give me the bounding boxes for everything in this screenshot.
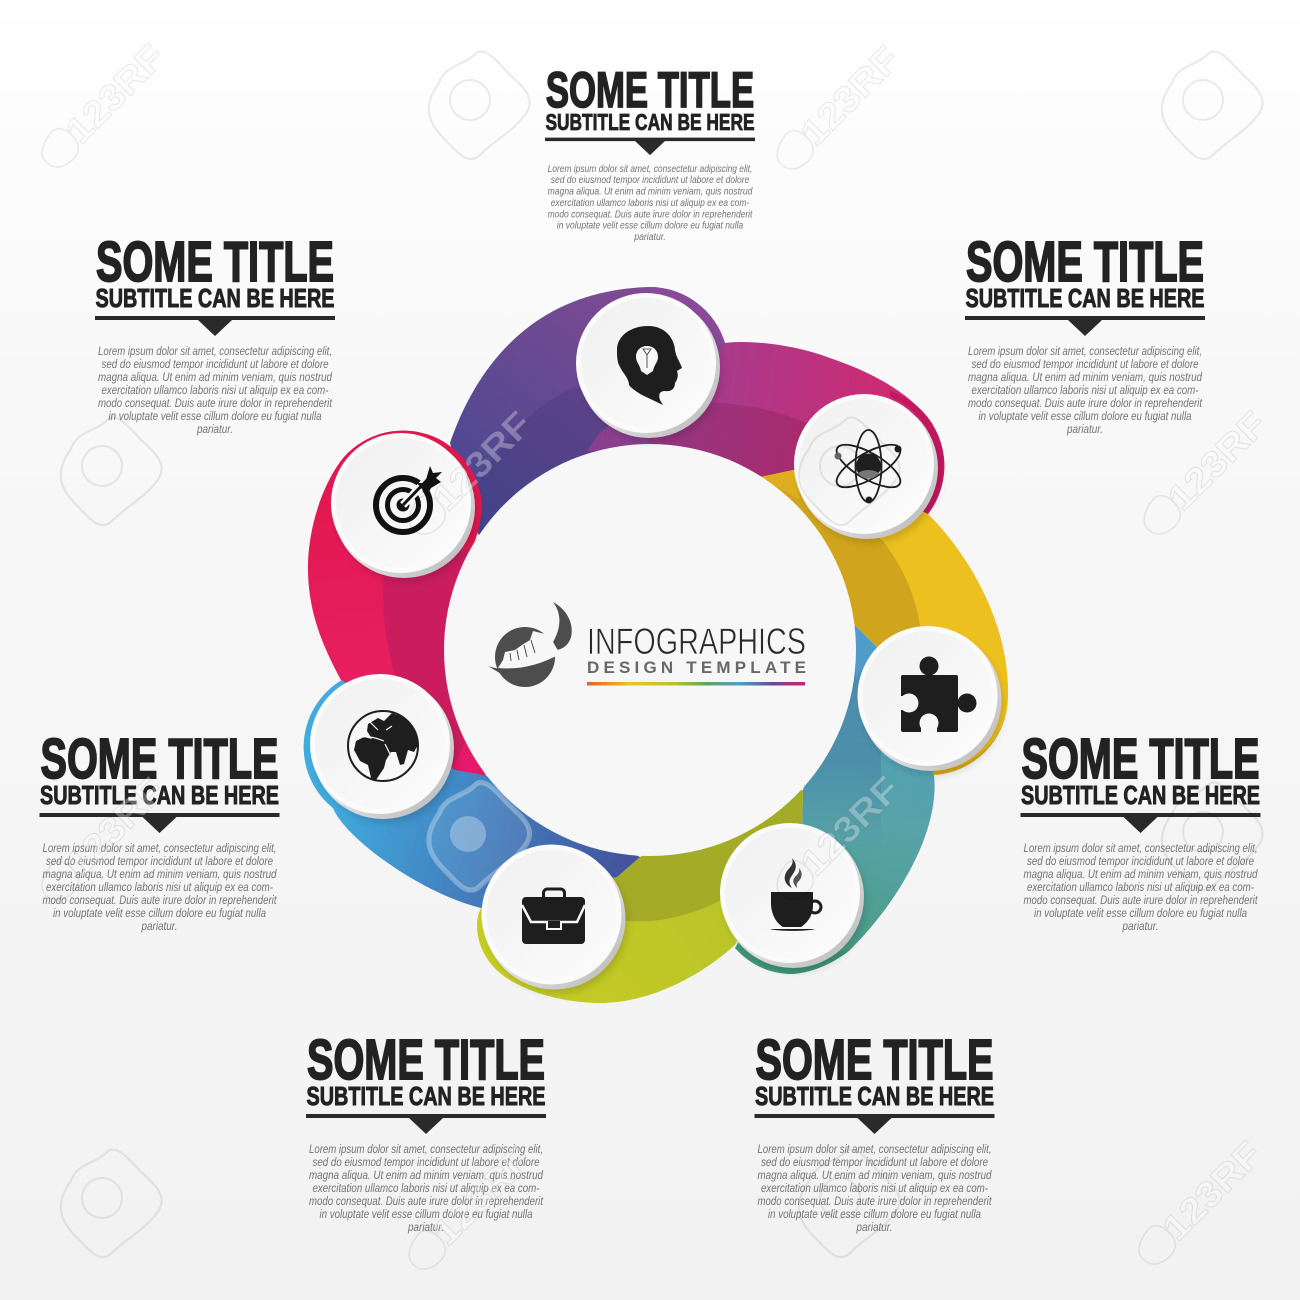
bottom left title block	[306, 1028, 546, 1234]
icon: briefcase	[522, 889, 585, 944]
logo subheading: DESIGN TEMPLATE	[587, 658, 806, 677]
band: olive	[477, 790, 803, 1003]
middle left title block: SUBTITLE CAN BE HERE	[40, 780, 279, 810]
bottom left title block: in voluptate velit esse cillum dolore eu fugiat nulla	[320, 1209, 532, 1221]
top title block: pariatur.	[633, 232, 666, 243]
node: target with arrow	[331, 433, 477, 582]
bottom right title block: in voluptate velit esse cillum dolore eu fugiat nulla	[768, 1209, 981, 1221]
upper right title block: magna aliqua. Ut enim ad minim veniam, quis nostrud	[968, 372, 1203, 384]
bottom right title block: sed do eiusmod tempor incididunt ut labore et dolore	[761, 1157, 988, 1169]
watermarks: 123RF	[792, 38, 908, 153]
watermarks: 123RF	[1159, 403, 1275, 518]
middle right title block: sed do eiusmod tempor incididunt ut labore et dolore	[1027, 856, 1254, 868]
middle left title block: modo consequat. Duis aute irure dolor in reprehenderit	[42, 895, 277, 907]
upper left title block: exercitation ullamco laboris nisi ut aliquip ex ea com-	[102, 385, 329, 397]
top title block: exercitation ullamco laboris nisi ut aliquip ex ea com-	[551, 198, 750, 209]
upper left title block: in voluptate velit esse cillum dolore eu fugiat nulla	[108, 411, 322, 423]
upper right title block: exercitation ullamco laboris nisi ut aliquip ex ea com-	[972, 385, 1199, 397]
bottom right title block: exercitation ullamco laboris nisi ut aliquip ex ea com-	[761, 1183, 988, 1195]
watermarks: 123RF	[424, 403, 540, 518]
bottom left title block: SOME TITLE	[307, 1028, 545, 1092]
bottom right title block: SOME TITLE	[755, 1028, 994, 1092]
upper right title block: in voluptate velit esse cillum dolore eu fugiat nulla	[978, 411, 1192, 423]
middle left title block: Lorem ipsum dolor sit amet, consectetur adipiscing elit,	[42, 843, 276, 855]
node: atom	[794, 394, 940, 543]
middle left title block: exercitation ullamco laboris nisi ut aliquip ex ea com-	[46, 882, 273, 894]
bottom left title block: Lorem ipsum dolor sit amet, consectetur adipiscing elit,	[309, 1144, 543, 1156]
icon: puzzle piece	[900, 656, 976, 733]
middle left title block	[40, 727, 280, 933]
bottom left title block: SUBTITLE CAN BE HERE	[306, 1081, 546, 1111]
middle left title block: pariatur.	[141, 921, 178, 933]
icon: target with arrow	[376, 466, 442, 532]
logo heading: INFOGRAPHICS	[587, 620, 806, 662]
top title block: SOME TITLE	[546, 62, 754, 118]
node: coffee cup	[720, 823, 866, 972]
blue tip rim over red	[304, 680, 352, 808]
bottom right title block	[754, 1028, 994, 1234]
bottom right title block: Lorem ipsum dolor sit amet, consectetur adipiscing elit,	[758, 1144, 992, 1156]
upper left title block: magna aliqua. Ut enim ad minim veniam, quis nostrud	[98, 372, 333, 384]
upper right title block: modo consequat. Duis aute irure dolor in reprehenderit	[968, 398, 1203, 410]
band: magenta	[650, 342, 944, 514]
yellow seam wedge	[760, 470, 800, 500]
icon: head with light bulb	[617, 326, 682, 405]
top title block: Lorem ipsum dolor sit amet, consectetur adipiscing elit,	[548, 164, 752, 175]
bottom right title block: magna aliqua. Ut enim ad minim veniam, quis nostrud	[758, 1170, 992, 1182]
middle right title block: pariatur.	[1122, 921, 1158, 933]
bottom left title block: pariatur.	[407, 1222, 444, 1234]
node: puzzle piece	[858, 626, 1003, 775]
band: teal	[735, 620, 935, 974]
top title block	[545, 62, 755, 243]
middle right title block: magna aliqua. Ut enim ad minim veniam, quis nostrud	[1024, 869, 1258, 881]
middle left title block: SOME TITLE	[40, 727, 279, 791]
upper left title block: Lorem ipsum dolor sit amet, consectetur adipiscing elit,	[98, 346, 332, 358]
band: red	[308, 431, 486, 776]
upper right title block: Lorem ipsum dolor sit amet, consectetur adipiscing elit,	[968, 346, 1202, 358]
middle left title block: magna aliqua. Ut enim ad minim veniam, quis nostrud	[42, 869, 277, 881]
watermarks: 123RF	[57, 36, 173, 151]
watermarks: 123RF	[792, 768, 908, 883]
upper right title block: pariatur.	[1066, 424, 1103, 436]
watermarks: 123RF	[57, 769, 173, 884]
node: globe	[310, 674, 456, 823]
upper left title block: SUBTITLE CAN BE HERE	[96, 283, 334, 313]
band: purple	[450, 287, 725, 537]
upper left title block: sed do eiusmod tempor incididunt ut labore et dolore	[102, 359, 328, 371]
middle right title block: Lorem ipsum dolor sit amet, consectetur adipiscing elit,	[1024, 843, 1258, 855]
band: blue	[304, 680, 640, 908]
upper right title block: sed do eiusmod tempor incididunt ut labore et dolore	[972, 359, 1198, 371]
node: head with light bulb	[576, 293, 722, 442]
upper left title block	[95, 230, 335, 436]
bottom right title block: SUBTITLE CAN BE HERE	[755, 1081, 994, 1111]
upper left title block: pariatur.	[196, 424, 233, 436]
bottom right title block: pariatur.	[856, 1222, 892, 1234]
middle right title block	[1020, 727, 1260, 933]
top title block: modo consequat. Duis aute irure dolor in reprehenderit	[548, 209, 753, 220]
watermarks: 123RF	[424, 1138, 540, 1253]
middle left title block: sed do eiusmod tempor incididunt ut labore et dolore	[46, 856, 273, 868]
icon: coffee cup	[770, 858, 821, 931]
upper right title block: SUBTITLE CAN BE HERE	[966, 283, 1204, 313]
upper right title block: SOME TITLE	[966, 230, 1204, 294]
watermarks: 123RF	[1154, 1133, 1270, 1248]
bottom right title block: modo consequat. Duis aute irure dolor in reprehenderit	[758, 1196, 992, 1208]
centre logo	[488, 602, 806, 687]
top title block: in voluptate velit esse cillum dolore eu fugiat nulla	[557, 221, 744, 232]
ribbon wheel	[304, 287, 1008, 1003]
bottom left title block: magna aliqua. Ut enim ad minim veniam, quis nostrud	[309, 1170, 544, 1182]
middle right title block: exercitation ullamco laboris nisi ut aliquip ex ea com-	[1027, 882, 1254, 894]
blue start wedge	[855, 625, 872, 680]
icon: globe	[348, 711, 418, 781]
upper left title block: SOME TITLE	[96, 230, 334, 294]
middle right title block: in voluptate velit esse cillum dolore eu fugiat nulla	[1034, 908, 1247, 920]
upper right title block	[965, 230, 1205, 436]
rainbow bar	[587, 682, 805, 686]
red tip rim over purple	[340, 431, 482, 547]
centre disc	[444, 444, 856, 856]
bottom left title block: exercitation ullamco laboris nisi ut aliquip ex ea com-	[312, 1183, 540, 1195]
band: yellow	[760, 470, 1008, 775]
top title block: SUBTITLE CAN BE HERE	[545, 109, 755, 135]
upper left title block: modo consequat. Duis aute irure dolor in reprehenderit	[98, 398, 333, 410]
bottom left title block: modo consequat. Duis aute irure dolor in reprehenderit	[309, 1196, 544, 1208]
middle left title block: in voluptate velit esse cillum dolore eu fugiat nulla	[53, 908, 266, 920]
top title block: sed do eiusmod tempor incididunt ut labore et dolore	[551, 175, 750, 186]
bottom left title block: sed do eiusmod tempor incididunt ut labore et dolore	[312, 1157, 540, 1169]
middle right title block: modo consequat. Duis aute irure dolor in reprehenderit	[1024, 895, 1258, 907]
top title block: magna aliqua. Ut enim ad minim veniam, quis nostrud	[548, 187, 753, 198]
icon: atom	[831, 430, 906, 504]
node: briefcase	[482, 844, 628, 994]
logo emblem	[488, 602, 572, 687]
purple tip rim over magenta	[650, 287, 725, 346]
